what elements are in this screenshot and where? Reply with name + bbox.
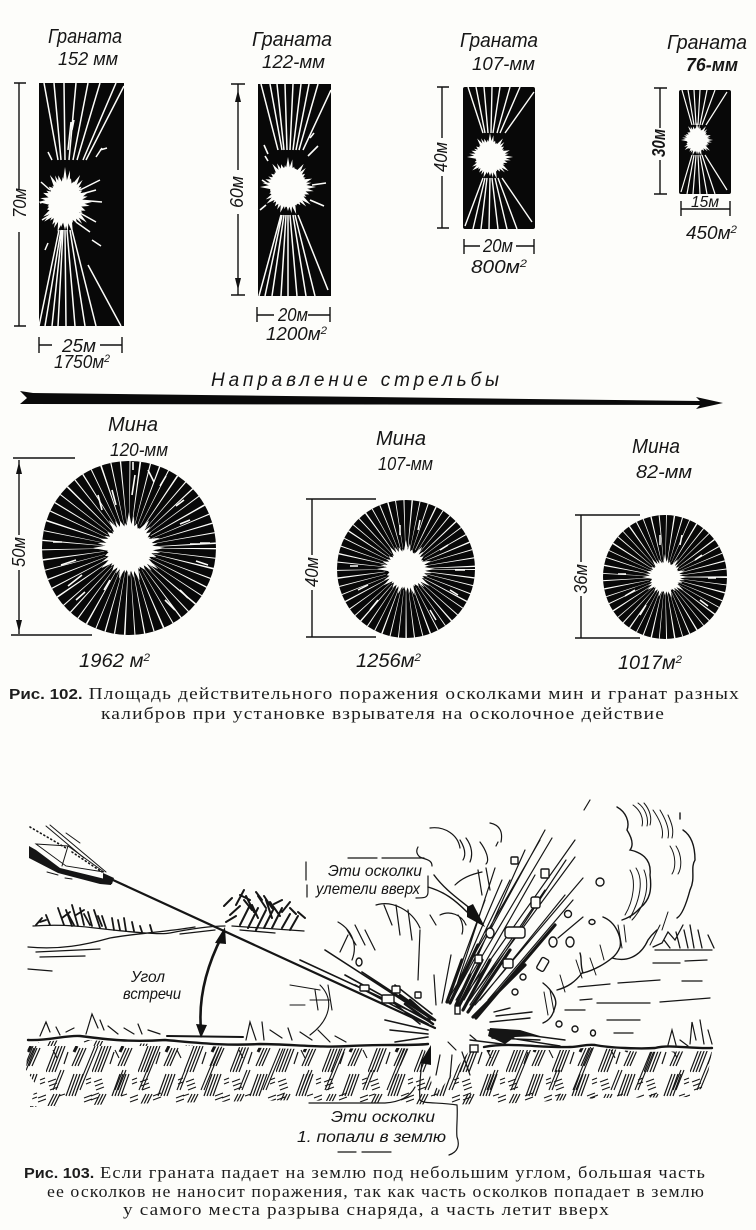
label: angle of impact: встречи	[123, 986, 181, 1003]
caption: figure 103: Рис. 103. Если граната падает на землю под небольшим углом, большая часть	[24, 1163, 706, 1182]
shell 122 mm block	[227, 29, 332, 344]
width dimension 25 m and area: 25м	[61, 336, 96, 356]
shell 76 mm block	[649, 32, 747, 243]
callout: fragments hitting the ground: Эти осколки	[331, 1109, 435, 1126]
heading: shell 122 mm: 122-мм	[262, 52, 325, 72]
heading: shell 76 mm	[667, 32, 747, 75]
width dimension 25 m and area: 1750м	[54, 352, 106, 372]
width dimension 15 m and area: 2	[730, 224, 737, 236]
illustration: shell striking the ground at a shallow angle	[20, 800, 720, 1155]
explosion rays and fragments	[300, 800, 604, 1078]
callout: fragments flying upward: улетели вверх	[315, 881, 421, 898]
callout: fragments hitting the ground	[297, 1045, 458, 1155]
callout: fragments flying upward: Эти осколки	[328, 863, 422, 880]
height dimension 40 m	[302, 499, 376, 637]
area 1017 m2: 1017м	[618, 653, 673, 674]
shell	[29, 825, 114, 885]
shell 107 mm block	[431, 30, 538, 277]
burst rectangle 76 mm	[679, 90, 731, 194]
width dimension 15 m and area	[681, 194, 737, 243]
height dimension 50 m	[9, 458, 92, 635]
height dimension 40 m	[431, 87, 451, 228]
area 1962 m2: 1962 м	[79, 651, 140, 672]
height dimension 30 m	[649, 88, 669, 194]
background terrain and bushes	[28, 890, 714, 1033]
height dimension 60 m	[227, 84, 247, 295]
height dimension 36 m	[571, 515, 640, 638]
height dimension 30 m: 30м	[649, 129, 669, 157]
heading: shell 122 mm: Граната	[252, 29, 332, 51]
trajectory line	[113, 880, 435, 1028]
height dimension 70 m	[10, 83, 30, 326]
area 1256 m2: 1256м	[356, 651, 411, 672]
width dimension 25 m and area	[39, 336, 122, 372]
height dimension 36 m: 36м	[571, 564, 591, 594]
width dimension 15 m and area: 450м	[686, 223, 728, 243]
width dimension 20 m and area: 20м	[277, 305, 308, 325]
heading: shell 122 mm	[252, 29, 332, 72]
heading: shell 76 mm: 76-мм	[686, 55, 738, 75]
caption: figure 103	[24, 1163, 706, 1219]
width dimension 20 m and area: 1200м	[266, 324, 318, 344]
width dimension 20 m and area	[257, 305, 330, 344]
width dimension 20 m and area: 20м	[482, 236, 513, 256]
heading: shell 152 mm: Граната	[48, 26, 122, 48]
heading: mortar 107 mm: 107-мм	[378, 454, 433, 474]
burst rectangle 152 mm	[36, 83, 124, 326]
heading: shell 152 mm: 152 мм	[58, 49, 118, 69]
burst rectangle 122 mm	[258, 84, 331, 296]
burst rectangle 107 mm	[463, 87, 535, 229]
shell 152 mm block	[10, 26, 124, 372]
caption: figure 103: ее осколков не наносит поражения, так как часть осколков попадает в землю	[47, 1182, 705, 1201]
angle of impact arrow	[196, 927, 226, 1038]
heading: mortar 107 mm: Мина	[376, 428, 426, 450]
caption: figure 102: Рис. 102. Площадь действительного поражения осколками мин и гранат разных	[9, 684, 740, 703]
area 1962 m2: 2	[142, 652, 150, 664]
label: angle of impact: Угол	[130, 969, 165, 986]
heading: shell 152 mm	[48, 26, 122, 69]
heading: mortar 82 mm: Мина	[632, 436, 680, 458]
firing direction arrow	[20, 391, 723, 409]
callout: fragments flying upward	[306, 847, 485, 927]
height dimension 40 m: 40м	[431, 142, 451, 172]
width dimension 15 m and area: 15м	[691, 194, 719, 211]
panel: fragmentation areas of shells	[10, 26, 747, 372]
mortar 82 mm block	[571, 436, 727, 674]
caption: figure 103: у самого места разрыва снаряда, а часть летит вверх	[123, 1200, 610, 1219]
burst circle 107 mm	[337, 500, 475, 638]
smoke clouds	[290, 803, 695, 1035]
width dimension 25 m and area: 2	[103, 353, 110, 365]
height dimension 50 m: 50м	[9, 537, 29, 567]
heading: mortar 120 mm	[108, 414, 168, 460]
heading: mortar 120 mm: 120-мм	[110, 440, 168, 460]
heading: shell 107 mm: 107-мм	[472, 54, 535, 74]
heading: mortar 107 mm	[376, 428, 433, 474]
area 1256 m2: 2	[413, 652, 421, 664]
burst circle 120 mm	[42, 461, 216, 635]
area 1017 m2: 2	[675, 654, 682, 666]
panel: fragmentation areas of mortar bombs	[9, 414, 727, 674]
burst circle 82 mm	[603, 515, 727, 639]
width dimension 20 m and area: 2	[519, 258, 527, 270]
soil hatching	[20, 1040, 720, 1110]
width dimension 20 m and area: 800м	[471, 257, 513, 277]
mortar 120 mm block	[9, 414, 216, 672]
height dimension 60 m: 60м	[227, 176, 247, 208]
firing direction label: Направление стрельбы	[211, 370, 499, 391]
heading: mortar 82 mm	[632, 436, 692, 482]
label: angle of impact	[123, 969, 181, 1003]
height dimension 70 m: 70м	[10, 188, 30, 218]
heading: mortar 82 mm: 82-мм	[636, 462, 692, 482]
ground surface and grass	[28, 1014, 712, 1048]
heading: shell 107 mm	[460, 30, 538, 74]
callout: fragments hitting the ground: 1. попали в землю	[297, 1129, 446, 1146]
width dimension 20 m and area: 2	[320, 325, 327, 337]
caption: figure 102	[9, 684, 740, 723]
heading: shell 76 mm: Граната	[667, 32, 747, 54]
heading: mortar 120 mm: Мина	[108, 414, 158, 436]
caption: figure 102: калибров при установке взрывателя на осколочное действие	[101, 704, 665, 723]
heading: shell 107 mm: Граната	[460, 30, 538, 52]
mortar 107 mm block	[302, 428, 475, 672]
width dimension 20 m and area	[464, 236, 534, 277]
height dimension 40 m: 40м	[302, 557, 322, 587]
